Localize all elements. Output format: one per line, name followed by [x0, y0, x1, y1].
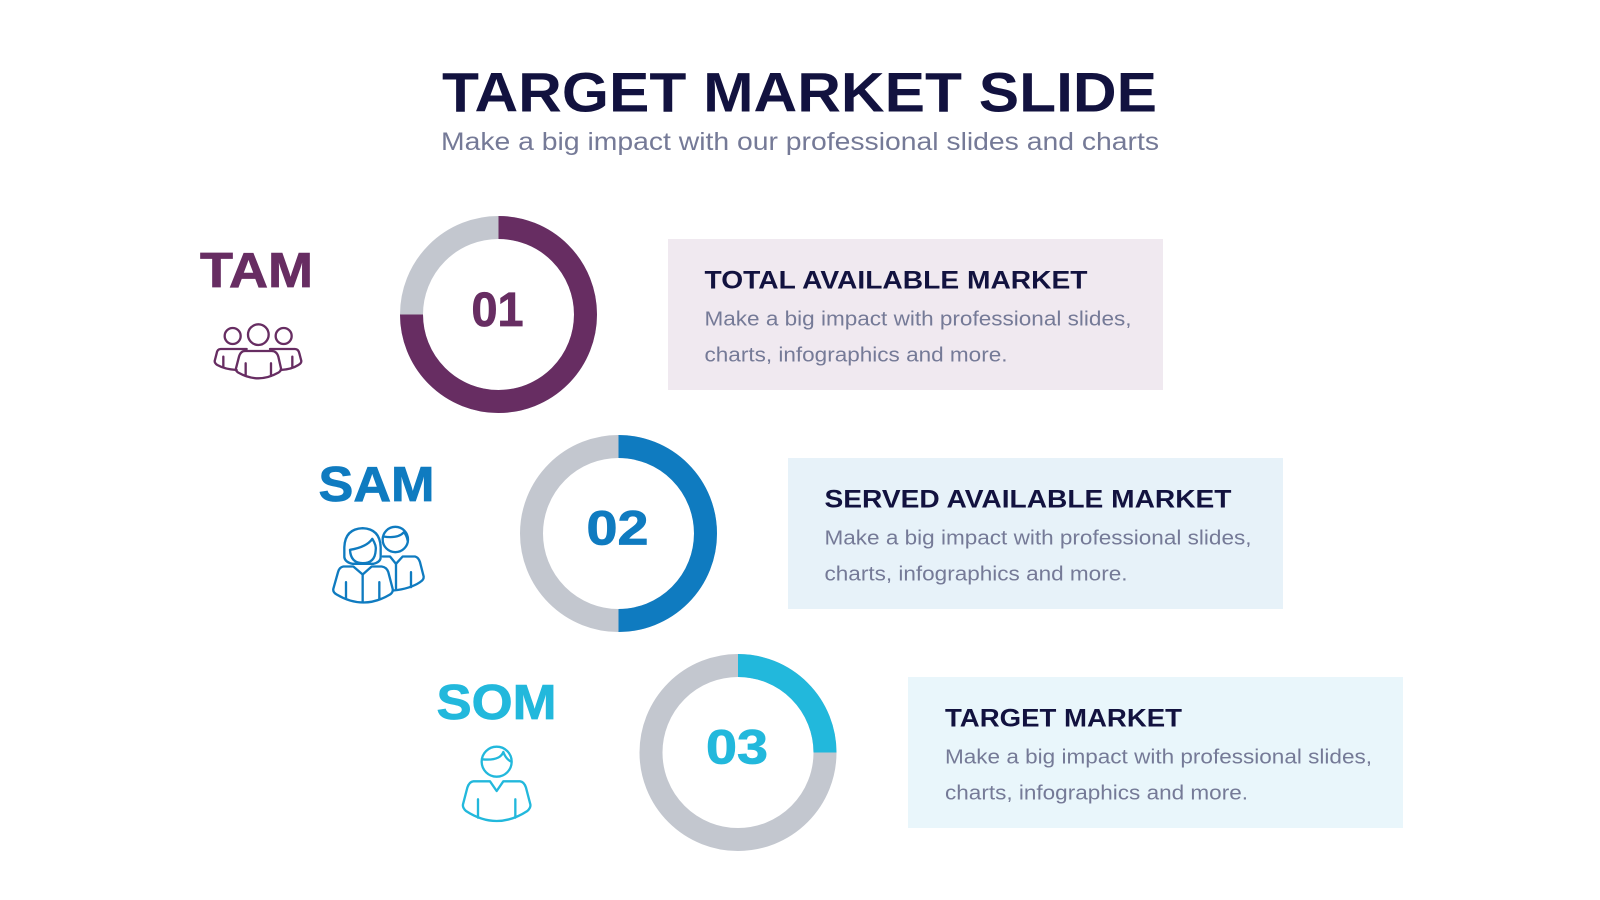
description: charts, infographics and more.	[704, 344, 1008, 366]
title: TARGET MARKET SLIDE	[442, 60, 1157, 124]
row: TAM	[200, 228, 1163, 402]
label: TAM: TAM	[200, 244, 313, 298]
donut chart: 50%	[532, 446, 706, 620]
row: SAM	[318, 446, 1283, 620]
description: charts, infographics and more.	[824, 562, 1128, 586]
number 01: 01	[472, 284, 524, 337]
description: Make a big impact with professional slides,	[824, 526, 1252, 550]
panel: total available market	[668, 239, 1163, 390]
donut chart: 25%	[651, 666, 825, 840]
panel: target market	[908, 677, 1403, 828]
panel: served available market	[788, 458, 1283, 609]
description: Make a big impact with professional slides,	[704, 308, 1132, 330]
number 03: 03	[706, 722, 768, 774]
label: SOM: SOM	[436, 676, 556, 730]
subtitle: Make a big impact with our professional slides and charts	[441, 128, 1159, 156]
number 02: 02	[586, 502, 648, 556]
row: SOM	[436, 666, 1403, 840]
description: charts, infographics and more.	[945, 782, 1248, 804]
heading: TOTAL AVAILABLE MARKET	[704, 266, 1088, 294]
donut chart: 75%	[412, 228, 586, 402]
icon: two people	[333, 527, 424, 602]
icon: single person	[463, 747, 530, 821]
label: SAM: SAM	[318, 458, 434, 512]
heading: TARGET MARKET	[945, 704, 1182, 732]
icon: group of three people	[215, 324, 301, 378]
description: Make a big impact with professional slides,	[945, 746, 1372, 768]
heading: SERVED AVAILABLE MARKET	[824, 486, 1232, 514]
